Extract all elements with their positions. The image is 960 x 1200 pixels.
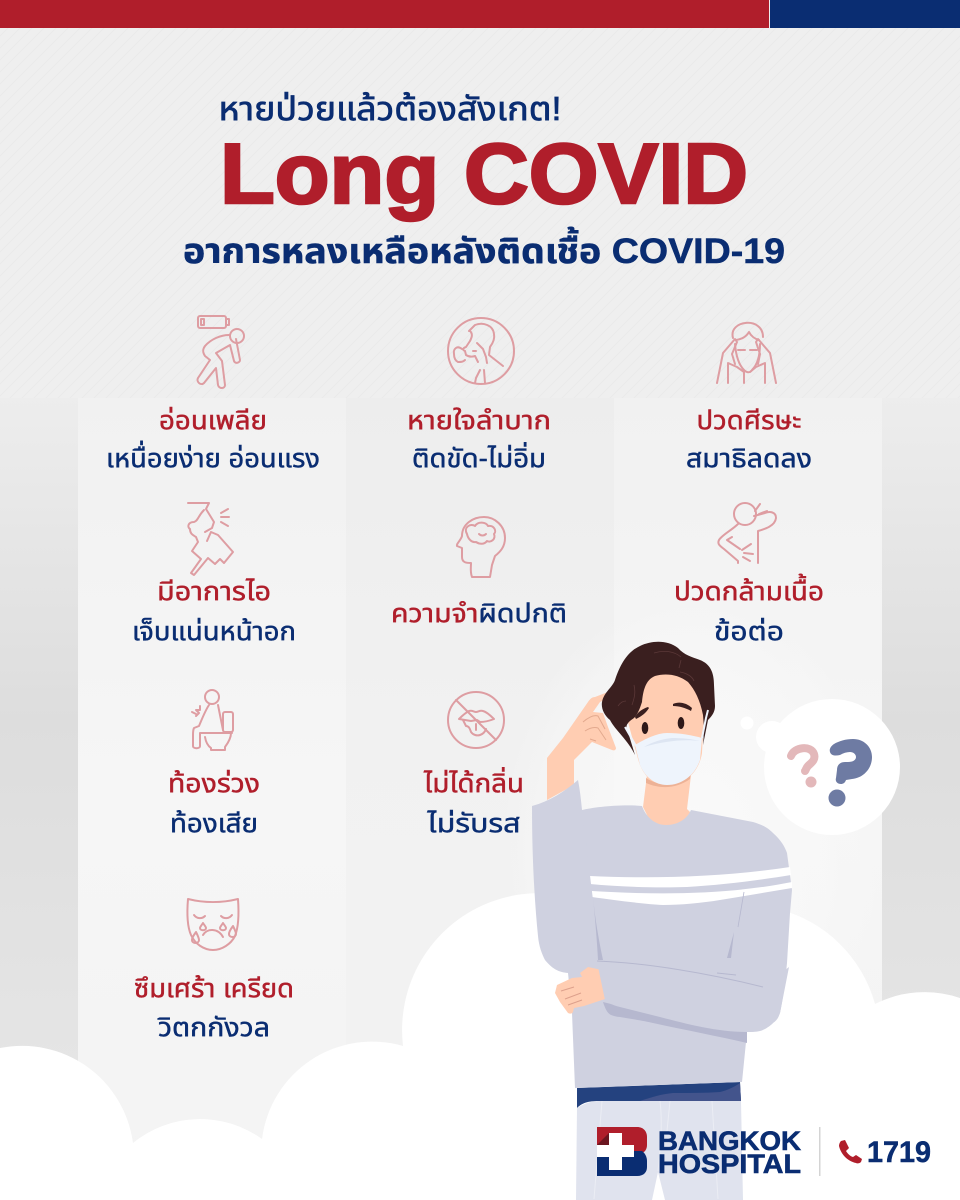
label: memory problems: ความจำ ผิดปกติ [391, 598, 567, 628]
logo wordmark: BANGKOK [658, 1126, 802, 1156]
title [183, 90, 785, 271]
symptom: breathing [407, 318, 551, 473]
eyebrows and eyes [635, 703, 692, 719]
label: ปวดศีรษะ [696, 405, 802, 435]
icon: crossed out tongue [448, 692, 504, 748]
sweater torso [562, 805, 792, 1088]
pants [576, 1101, 743, 1200]
icon: coughing person [188, 503, 233, 575]
symptom: headache [686, 323, 812, 473]
forearm shadow [603, 1002, 747, 1043]
icon: back and joint pain [718, 503, 776, 563]
symptom: cough: เจ็บแน่นหน้าอก [132, 616, 296, 646]
label: ซึมเศร้า เครียด [134, 973, 294, 1003]
thought bubble [740, 699, 900, 835]
sweater fold shadows [593, 897, 734, 960]
symptom: fatigue: เหนื่อยง่าย อ่อนแรง [106, 440, 320, 473]
symptom: memory [391, 517, 567, 628]
hotline number: 1719 [867, 1136, 931, 1169]
title main: Long COVID: Long COVID [220, 127, 748, 222]
jeans waistband [577, 1082, 741, 1108]
symptom: loss of smell and taste [423, 692, 524, 838]
icon: head with brain [457, 517, 505, 577]
symptom: diarrhea: ท้องเสีย [170, 808, 258, 838]
icon: person on toilet [192, 690, 233, 750]
symptom: depression: วิตกกังวล [157, 1012, 270, 1042]
clouds [0, 893, 960, 1200]
raised arm [547, 690, 616, 800]
label: อ่อนเพลีย [159, 405, 267, 435]
icon: crying mask [187, 899, 239, 950]
top bar [0, 0, 960, 28]
icon: headache [717, 323, 776, 383]
hair [602, 642, 715, 755]
title kicker: หายป่วยแล้วต้องสังเกต! [218, 90, 562, 127]
head and face [626, 673, 704, 785]
hand under arm [555, 967, 608, 1014]
face mask [635, 733, 702, 785]
icon: phone [839, 1140, 862, 1163]
label: ปวดกล้ามเนื้อ [674, 573, 824, 606]
logo: Bangkok Hospital: HOSPITAL [658, 1149, 801, 1179]
symptom: headache: สมาธิลดลง [686, 443, 812, 473]
neck [643, 775, 691, 827]
logo mark [597, 1127, 647, 1176]
symptom: muscle pain: ข้อต่อ [714, 616, 784, 646]
label: หายใจลำบาก [407, 405, 551, 435]
symptom: diarrhea [168, 690, 260, 838]
left sleeve [532, 780, 595, 973]
symptom: depression [134, 899, 294, 1042]
symptom: muscle pain [674, 503, 824, 646]
icon: tired person with low battery [198, 316, 244, 388]
label: ท้องร่วง [168, 768, 260, 798]
small question mark [791, 748, 816, 788]
logo: Bangkok Hospital [597, 1126, 931, 1179]
symptom: fatigue [106, 316, 320, 473]
illustration: man with mask [532, 642, 792, 1200]
icon: shortness of breath [448, 318, 514, 384]
subtitle: อาการหลงเหลือหลังติดเชื้อ COVID-19 [183, 226, 785, 271]
label: ไม่ได้กลิ่น [423, 767, 524, 798]
symptom: breathing: ติดขัด-ไม่อิ่ม [412, 442, 546, 473]
symptom: cough [132, 503, 296, 646]
symptom: loss of smell and taste: ไม่รับรส [426, 808, 520, 838]
large question mark [828, 739, 872, 806]
sweater stripes [590, 867, 792, 905]
label: มีอาการไอ [157, 576, 271, 606]
crossed forearm [597, 962, 789, 1032]
